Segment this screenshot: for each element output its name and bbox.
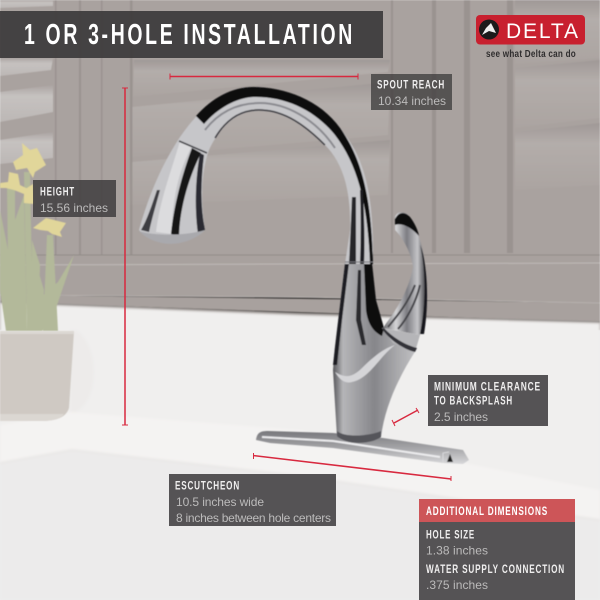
handle: [382, 212, 427, 352]
callout: height: HEIGHT: [40, 184, 75, 198]
title banner: 1 OR 3-HOLE INSTALLATION: [24, 19, 355, 51]
callout: spout reach: 10.34 inches: [378, 94, 446, 108]
right louvers: [515, 0, 600, 190]
callout: escutcheon: 8 inches between hole centers: [176, 511, 331, 525]
dimension line: height: [122, 88, 128, 425]
callout: escutcheon: 10.5 inches wide: [176, 495, 264, 509]
callout: minimum clearance: TO BACKSPLASH: [434, 394, 513, 408]
panel: additional dimensions: [419, 499, 575, 600]
panel body: HOLE SIZE: [426, 528, 475, 542]
background: window shutters: [0, 0, 600, 330]
dimension line: escutcheon: [253, 453, 451, 481]
backsplash wall and countertop: [0, 303, 600, 600]
panel body: 1.38 inches: [426, 544, 488, 558]
title banner: [0, 11, 383, 58]
panel heading: [419, 499, 575, 522]
Delta logo: [476, 15, 585, 60]
Delta logo: see what Delta can do: [486, 49, 576, 60]
callout: spout reach: [371, 74, 452, 110]
plant: daffodils: [0, 143, 74, 331]
left louvers: [0, 0, 53, 164]
callout: height: 15.56 inches: [40, 201, 108, 215]
panel body: [419, 522, 575, 600]
panel body: .375 inches: [426, 578, 488, 592]
callout: escutcheon: ESCUTCHEON: [175, 478, 240, 492]
callout: height: [33, 180, 116, 217]
callout: escutcheon: [169, 474, 336, 526]
callout: spout reach: SPOUT REACH: [377, 78, 445, 92]
escutcheon deck plate: [256, 431, 469, 464]
panel heading: ADDITIONAL DIMENSIONS: [426, 504, 548, 518]
centre louvers: [130, 60, 390, 205]
dimension line: clearance: [392, 408, 419, 426]
spout and pull-down head: [139, 87, 373, 264]
plant pot: [0, 331, 74, 421]
Delta logo: DELTA: [506, 20, 578, 43]
callout: minimum clearance: 2.5 inches: [434, 410, 488, 424]
sill: [0, 255, 600, 323]
stiles: [55, 0, 513, 255]
callout: minimum clearance: [428, 375, 548, 426]
dimension line: spout reach: [170, 74, 358, 80]
faucet body: [333, 263, 416, 443]
callout: minimum clearance: MINIMUM CLEARANCE: [434, 380, 541, 394]
faucet: [139, 87, 469, 464]
